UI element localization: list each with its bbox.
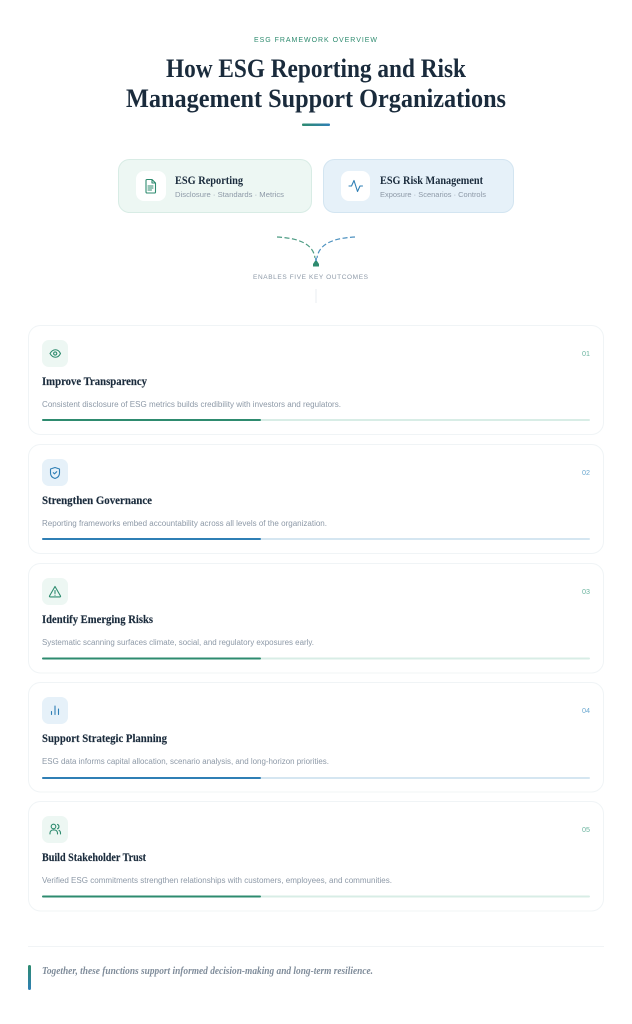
step heading: Support Strategic Planning [42, 733, 167, 745]
footer accent bar [28, 965, 31, 990]
closing statement: Together, these functions support informed decision-making and long-term resilience. [42, 966, 373, 977]
step number: 02 [582, 468, 590, 477]
progress bar [42, 777, 590, 779]
step number: 05 [582, 825, 590, 834]
ESG Risk Management subtitle: Exposure · Scenarios · Controls [380, 190, 486, 199]
progress bar [42, 419, 590, 421]
title: Management Support Organizations [126, 84, 506, 113]
step description: Reporting frameworks embed accountability across all levels of the organization. [42, 519, 327, 528]
panel: ESG Reporting [118, 160, 312, 212]
panel: Identify Emerging Risks [28, 564, 604, 673]
step number: 01 [582, 349, 590, 358]
connector arrows [277, 237, 355, 266]
footer divider [28, 946, 604, 947]
panel: Improve Transparency [28, 326, 604, 434]
step description: Systematic scanning surfaces climate, social, and regulatory exposures early. [42, 638, 314, 647]
panel: Build Stakeholder Trust [28, 802, 604, 911]
title accent bar [302, 124, 330, 126]
ESG Reporting subtitle: Disclosure · Standards · Metrics [175, 190, 284, 199]
title [126, 54, 506, 113]
panel: Strengthen Governance [28, 444, 604, 554]
icon: pulse [341, 171, 370, 201]
step number: 03 [582, 587, 590, 596]
panel: Support Strategic Planning [28, 682, 604, 792]
icon: warning triangle [42, 578, 68, 605]
progress bar [42, 658, 590, 660]
icon: people [42, 816, 68, 843]
step number: 04 [582, 706, 590, 715]
step description: Verified ESG commitments strengthen relationships with customers, employees, and communities. [42, 876, 392, 885]
progress bar [42, 896, 590, 898]
step heading: Identify Emerging Risks [42, 614, 153, 626]
step description: ESG data informs capital allocation, scenario analysis, and long-horizon priorities. [42, 757, 329, 766]
icon: shield [42, 459, 68, 486]
eyebrow: ESG FRAMEWORK OVERVIEW [254, 37, 377, 44]
step heading: Strengthen Governance [42, 495, 152, 507]
title: How ESG Reporting and Risk [166, 54, 466, 83]
ESG Risk Management heading: ESG Risk Management [380, 175, 483, 187]
connector label: ENABLES FIVE KEY OUTCOMES [253, 274, 369, 281]
step heading: Build Stakeholder Trust [42, 852, 146, 864]
icon: eye [42, 340, 68, 367]
progress bar [42, 538, 590, 540]
connector stem [316, 289, 317, 303]
step description: Consistent disclosure of ESG metrics builds credibility with investors and regulators. [42, 400, 341, 409]
icon: document [136, 171, 166, 201]
panel: ESG Risk Management [324, 160, 514, 212]
ESG Reporting heading: ESG Reporting [175, 175, 243, 187]
icon: bar chart [42, 697, 68, 724]
step heading: Improve Transparency [42, 376, 147, 388]
